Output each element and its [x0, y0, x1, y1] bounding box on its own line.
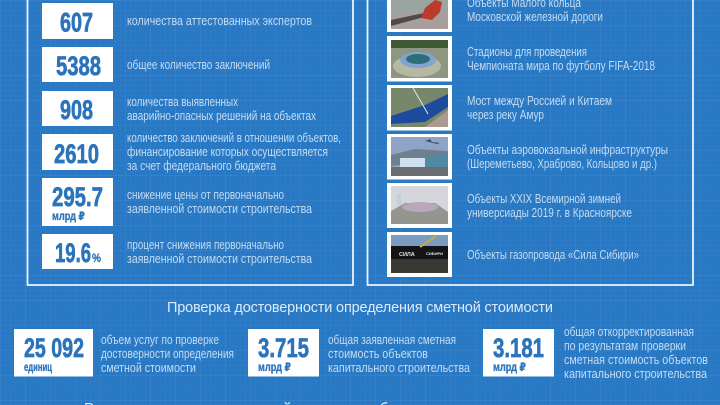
- object: airports: [387, 134, 668, 180]
- object: airports: (Шереметьево, Храброво, Кольцово и др.): [467, 157, 657, 171]
- stat: 295.7 billion rubles: заявленной стоимости строительства: [127, 202, 312, 216]
- object: Universiade 2019: [387, 183, 632, 228]
- stat: 19.6 percent: %: [92, 253, 101, 265]
- stat: 19.6 percent: [42, 234, 312, 269]
- stat: 908: [42, 91, 317, 126]
- stat: 2610: за счет федерального бюджета: [127, 159, 276, 173]
- object: Power of Siberia pipeline: Объекты газопровода «Сила Сибири»: [467, 248, 639, 262]
- stat: 19.6 percent: 19.6: [55, 238, 91, 268]
- object: airports: Объекты аэровокзальной инфраструктуры: [467, 143, 668, 157]
- object: Universiade 2019: универсиады 2019 г. в Красноярске: [467, 206, 632, 220]
- stat: 3.715 billion rubles: общая заявленная сметная: [328, 333, 456, 347]
- stat: 25 092 units: единиц: [24, 362, 52, 374]
- stat: 3.715 billion rubles: стоимость объектов: [328, 347, 428, 361]
- stat: 2610: количество заключений в отношении объектов,: [127, 131, 341, 145]
- object: FIFA-2018 stadiums: Стадионы для проведения: [467, 45, 587, 59]
- stat: 908: количества выявленных: [127, 95, 239, 109]
- stat: 3.181 billion rubles: [483, 325, 708, 381]
- stat: 25 092 units: объем услуг по проверке: [101, 333, 219, 347]
- stat: 607: [42, 3, 312, 39]
- stat: 3.715 billion rubles: 3.715: [258, 333, 309, 363]
- stat: 908: 908: [60, 95, 93, 125]
- object: Moscow Central Circle: Московской железной дороги: [467, 10, 603, 24]
- panel: expert statistics: [28, 0, 353, 285]
- stat: 295.7 billion rubles: [42, 178, 312, 226]
- stat: 25 092 units: 25 092: [24, 333, 84, 363]
- stat: 2610: [42, 131, 341, 173]
- heading: cost verification: Проверка достоверности определения сметной стоимости: [167, 300, 553, 316]
- stat: 25 092 units: [14, 329, 234, 376]
- object: Amur bridge: [387, 85, 612, 130]
- stat: 19.6 percent: процент снижения первоначально: [127, 238, 284, 252]
- stat: 295.7 billion rubles: млрд ₽: [52, 211, 85, 223]
- stat: 2610: 2610: [54, 139, 99, 169]
- stat: 5388: общее количество заключений: [127, 58, 270, 72]
- stat: 3.715 billion rubles: млрд ₽: [258, 362, 291, 374]
- stat: 295.7 billion rubles: 295.7: [52, 182, 103, 212]
- stat: 607: 607: [60, 8, 93, 38]
- object: Power of Siberia pipeline: СИБИРИ: [426, 251, 443, 256]
- stat: 25 092 units: достоверности определения: [101, 347, 234, 361]
- stat: 607: количества аттестованных экспертов: [127, 14, 312, 28]
- object: Power of Siberia pipeline: [387, 232, 639, 277]
- stat: 3.181 billion rubles: 3.181: [493, 333, 544, 363]
- object: FIFA-2018 stadiums: [387, 36, 655, 82]
- stat: 25 092 units: сметной стоимости: [101, 361, 196, 375]
- stat: 295.7 billion rubles: снижение цены от первоначально: [127, 188, 284, 202]
- object: Moscow Central Circle: [387, 0, 603, 32]
- stat: 3.181 billion rubles: общая откорректированная: [564, 325, 694, 339]
- object: Power of Siberia pipeline: СИЛА: [399, 252, 415, 258]
- stat: 908: аварийно-опасных решений на объектах: [127, 109, 317, 123]
- stat: 3.715 billion rubles: [248, 329, 470, 376]
- stat: 3.181 billion rubles: млрд ₽: [493, 362, 526, 374]
- object: Universiade 2019: Объекты XXIX Всемирной зимней: [467, 192, 621, 206]
- stat: 5388: [42, 47, 270, 82]
- stat: 3.715 billion rubles: капитального строительства: [328, 361, 470, 375]
- stat: 5388: 5388: [56, 51, 101, 81]
- panel: major objects: [368, 0, 693, 285]
- stat: 19.6 percent: заявленной стоимости строительства: [127, 252, 312, 266]
- object: Amur bridge: Мост между Россией и Китаем: [467, 94, 612, 108]
- stat: 2610: финансирование которых осуществляется: [127, 145, 328, 159]
- stat: 3.181 billion rubles: по результатам проверки: [564, 339, 686, 353]
- object: Amur bridge: через реку Амур: [467, 108, 544, 122]
- object: FIFA-2018 stadiums: Чемпионата мира по футболу FIFA-2018: [467, 59, 655, 73]
